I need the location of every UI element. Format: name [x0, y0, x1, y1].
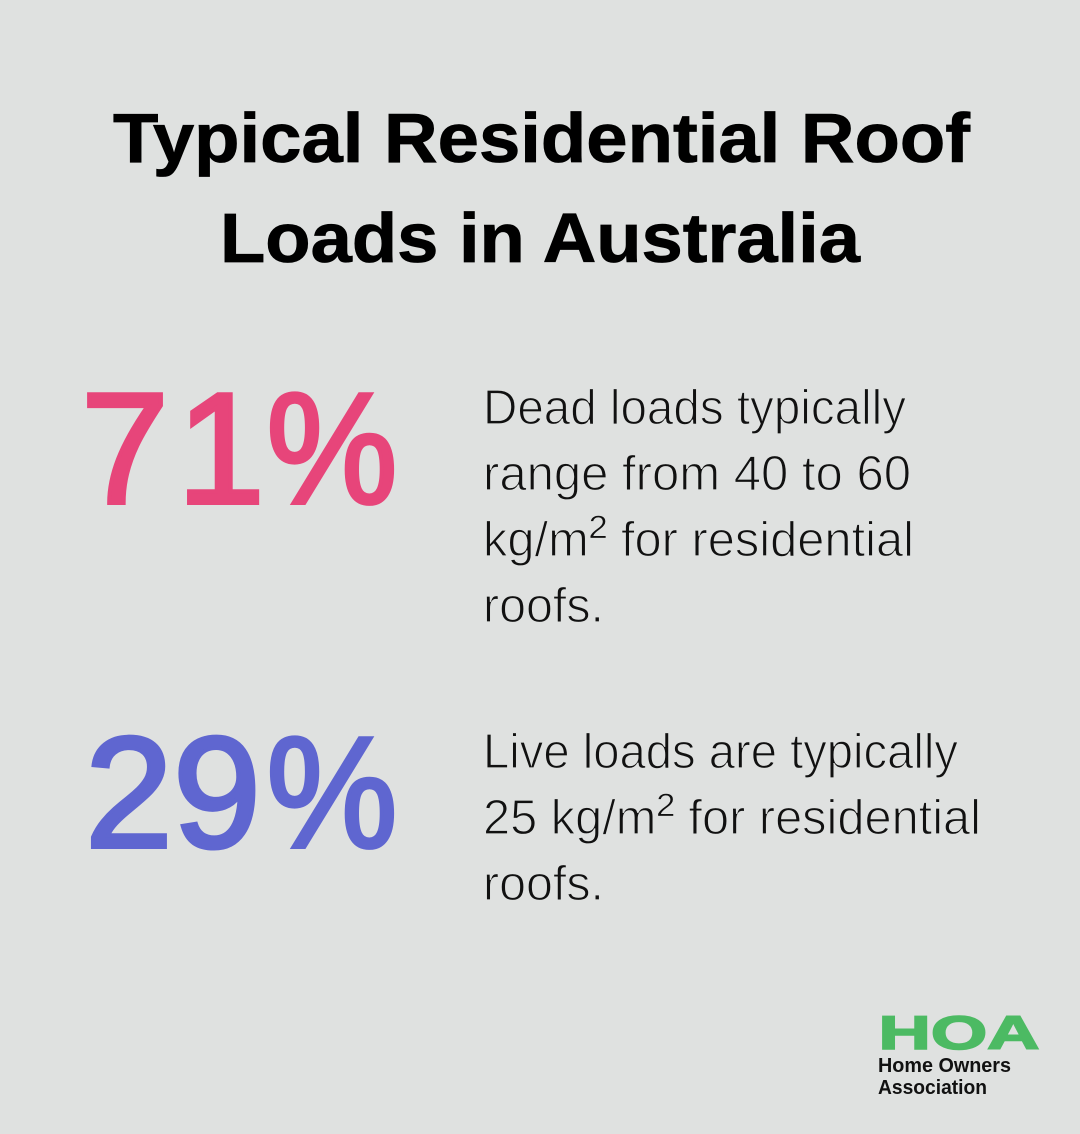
statistic: 29% live loads [85, 705, 981, 911]
71% figure: 71 [81, 361, 265, 537]
dead loads description: kg/m [483, 513, 589, 567]
dead loads description [483, 381, 914, 633]
title: Loads in Australia [220, 199, 861, 277]
29% figure [85, 705, 398, 881]
dead loads description: Dead loads typically [483, 381, 906, 435]
logo: Home Owners Association [878, 1006, 1040, 1099]
title [113, 99, 971, 277]
live loads description: Live loads are typically [483, 725, 958, 779]
dead loads description: range from 40 to 60 [483, 447, 911, 501]
logo mark HOA: HOA [878, 1006, 1040, 1059]
dead loads description: roofs. [483, 579, 604, 633]
dead loads description: for residential [607, 513, 914, 567]
logo wordmark: Home Owners [878, 1055, 1011, 1077]
live loads description: 25 kg/m [483, 791, 657, 845]
dead loads description: ² [589, 503, 607, 566]
logo wordmark [878, 1055, 1011, 1099]
live loads description: for residential [675, 791, 981, 845]
29% figure: % [266, 705, 398, 881]
statistic: 71% dead loads [81, 361, 914, 633]
live loads description: roofs. [483, 857, 604, 911]
29% figure: 29 [85, 705, 261, 881]
live loads description: ² [656, 781, 675, 844]
logo wordmark: Association [878, 1077, 987, 1099]
71% figure [81, 361, 398, 537]
live loads description [483, 725, 981, 911]
title: Typical Residential Roof [113, 99, 971, 177]
71% figure: % [266, 361, 398, 537]
